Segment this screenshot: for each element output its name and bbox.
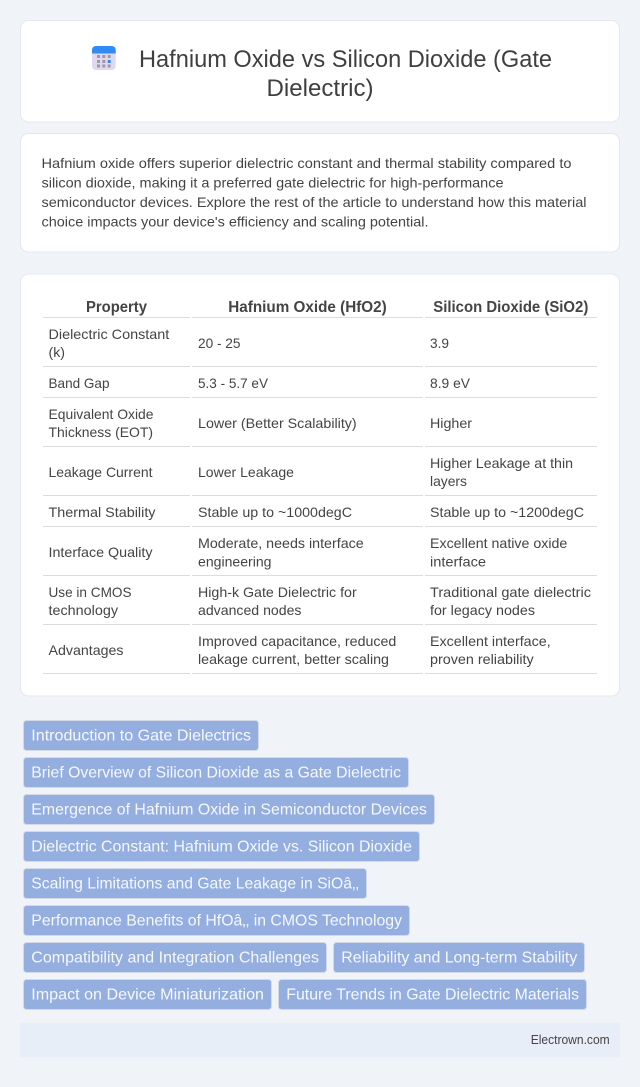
- tag: miniaturization: [24, 980, 272, 1010]
- row: leakage current: layers: [430, 473, 467, 489]
- title: Dielectric): [266, 75, 374, 102]
- row: thermal stability: Stable up to ~1000degC: [198, 504, 352, 520]
- row: leakage current: Leakage Current: [48, 464, 153, 480]
- intro text: [42, 155, 586, 230]
- row: interface quality: Interface Quality: [48, 544, 152, 560]
- tag: compatibility: Compatibility and Integration Challenges: [31, 950, 319, 967]
- tag: emergence of hafnium oxide: [24, 794, 434, 824]
- table header: [86, 299, 588, 316]
- tag: introduction: Introduction to Gate Dielectrics: [31, 728, 251, 745]
- row: use in CMOS technology: for legacy nodes: [430, 602, 535, 618]
- title: Hafnium Oxide vs Silicon Dioxide (Gate: [139, 46, 552, 73]
- footer: [20, 1023, 620, 1057]
- row: leakage current: [48, 455, 573, 489]
- row: interface quality: [48, 535, 568, 570]
- row: dielectric constant: 20 - 25: [198, 335, 241, 351]
- tag: dielectric constant: Dielectric Constant: Hafnium Oxide vs. Silicon Dioxide: [31, 839, 412, 856]
- row: dielectric constant: [48, 326, 449, 360]
- row: advantages: Excellent interface,: [430, 633, 551, 649]
- tag: scaling limitations: Scaling Limitations and Gate Leakage in SiOâ‚‚: [31, 876, 359, 893]
- row: equivalent oxide thickness: Lower (Better Scalability): [198, 415, 357, 431]
- tag: miniaturization: Impact on Device Miniaturization: [31, 987, 264, 1004]
- intro text: semiconductor devices. Explore the rest of the article to understand how this material: [42, 194, 586, 210]
- tag: scaling limitations: [24, 868, 366, 898]
- row: advantages: proven reliability: [430, 651, 534, 667]
- row: equivalent oxide thickness: Thickness (EOT): [48, 424, 153, 440]
- row: equivalent oxide thickness: Higher: [430, 415, 472, 431]
- row: advantages: [48, 633, 551, 667]
- row: dielectric constant: 3.9: [430, 335, 449, 351]
- row: interface quality: interface: [430, 554, 486, 570]
- row: use in CMOS technology: advanced nodes: [198, 602, 302, 618]
- row: use in CMOS technology: High-k Gate Dielectric for: [198, 584, 357, 600]
- panel: comparison table: [20, 274, 620, 696]
- row: dielectric constant: Dielectric Constant: [48, 326, 169, 342]
- row: advantages: Improved capacitance, reduced: [198, 633, 396, 649]
- tag: emergence of hafnium oxide: Emergence of Hafnium Oxide in Semiconductor Devices: [31, 802, 427, 819]
- panel: title card: [20, 20, 620, 122]
- table header: Hafnium Oxide (HfO2): [228, 299, 387, 316]
- row: use in CMOS technology: Use in CMOS: [48, 584, 132, 600]
- row: band gap: 5.3 - 5.7 eV: [198, 375, 269, 391]
- row: advantages: leakage current, better scaling: [198, 651, 389, 667]
- row: band gap: Band Gap: [48, 375, 110, 391]
- row: equivalent oxide thickness: Equivalent Oxide: [48, 406, 154, 422]
- row: interface quality: engineering: [198, 554, 272, 570]
- footer: Electrown.com: [531, 1033, 610, 1047]
- table header: Property: [86, 299, 147, 316]
- panel: introduction: [20, 134, 620, 252]
- row: interface quality: Moderate, needs interface: [198, 535, 364, 551]
- tag: reliability: [334, 942, 584, 972]
- tag: introduction: [24, 720, 258, 750]
- tag: performance benefits: [24, 906, 410, 936]
- tag: future trends: [278, 980, 586, 1010]
- tag: future trends: Future Trends in Gate Dielectric Materials: [286, 987, 579, 1004]
- row: leakage current: Higher Leakage at thin: [430, 455, 573, 471]
- row: use in CMOS technology: Traditional gate dielectric: [430, 584, 591, 600]
- tag: compatibility: [24, 942, 326, 972]
- intro text: silicon dioxide, making it a preferred gate dielectric for high-performance: [42, 174, 504, 190]
- row: equivalent oxide thickness: [48, 406, 472, 440]
- tag: reliability: Reliability and Long-term Stability: [341, 950, 577, 967]
- row: dielectric constant: (k): [48, 344, 65, 360]
- topic links: [24, 720, 586, 1010]
- row: thermal stability: [48, 504, 584, 520]
- tag: performance benefits: Performance Benefits of HfOâ‚‚ in CMOS Technology: [31, 913, 402, 930]
- table header: Silicon Dioxide (SiO2): [433, 299, 588, 316]
- tag: silicon dioxide overview: [24, 758, 408, 788]
- intro text: Hafnium oxide offers superior dielectric constant and thermal stability compared to: [42, 155, 572, 171]
- intro text: choice impacts your device's efficiency and scaling potential.: [42, 214, 428, 230]
- row: use in CMOS technology: technology: [48, 602, 118, 618]
- tag: dielectric constant: [24, 832, 420, 862]
- title: [139, 46, 552, 102]
- row: interface quality: Excellent native oxide: [430, 535, 568, 551]
- row: use in CMOS technology: [48, 584, 591, 618]
- row: thermal stability: Stable up to ~1200degC: [430, 504, 584, 520]
- row: leakage current: Lower Leakage: [198, 464, 294, 480]
- tag: silicon dioxide overview: Brief Overview of Silicon Dioxide as a Gate Dielectric: [31, 765, 401, 782]
- row: advantages: Advantages: [48, 642, 124, 658]
- row: band gap: [48, 375, 471, 391]
- icon: calendar: [92, 46, 116, 70]
- row: thermal stability: Thermal Stability: [48, 504, 156, 520]
- row: band gap: 8.9 eV: [430, 375, 471, 391]
